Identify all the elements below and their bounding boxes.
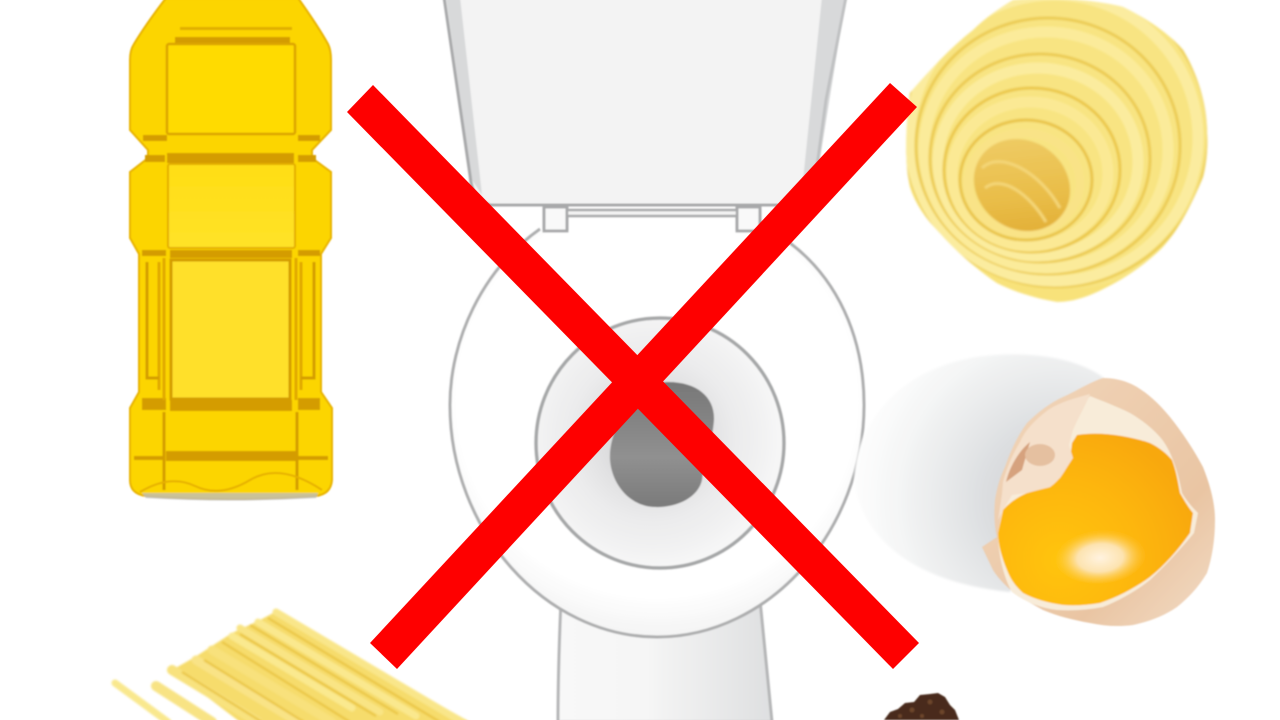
bottle base shadow (142, 493, 318, 500)
bottle bands (134, 27, 328, 461)
yolk highlight (1052, 524, 1148, 586)
egg yolk (998, 434, 1193, 605)
icon: spaghetti bundle (115, 612, 470, 720)
toilet hinges (544, 207, 760, 231)
toilet pedestal (558, 600, 772, 720)
red cross mark (347, 83, 919, 669)
base wrinkle (140, 473, 322, 492)
toilet tank (444, 0, 846, 203)
cross bar: top-right to bottom-left (370, 83, 917, 669)
pasta nest hollow (973, 138, 1071, 232)
middle label panel (168, 164, 295, 248)
icon: pasta nest (904, 0, 1209, 304)
spaghetti body (172, 612, 470, 720)
egg inner membrane (998, 396, 1198, 610)
icon: coffee grounds (884, 693, 959, 720)
pasta coil rings (894, 0, 1234, 295)
icon: oil bottle (130, 0, 332, 500)
icon: cracked egg (982, 378, 1215, 626)
icon: toilet (444, 0, 864, 720)
torn shell fragment (998, 394, 1090, 520)
toilet drain (610, 382, 714, 507)
large lower panel (171, 260, 290, 399)
cross bar: top-left to bottom-right (347, 85, 919, 669)
egg shell (982, 378, 1215, 626)
top label panel (167, 44, 295, 134)
egg shadow (855, 354, 1104, 592)
spaghetti strands (115, 612, 462, 720)
side ribs (147, 258, 314, 490)
toilet bowl rim (450, 229, 864, 637)
toilet basin (536, 318, 784, 568)
tank side shading (446, 0, 846, 195)
